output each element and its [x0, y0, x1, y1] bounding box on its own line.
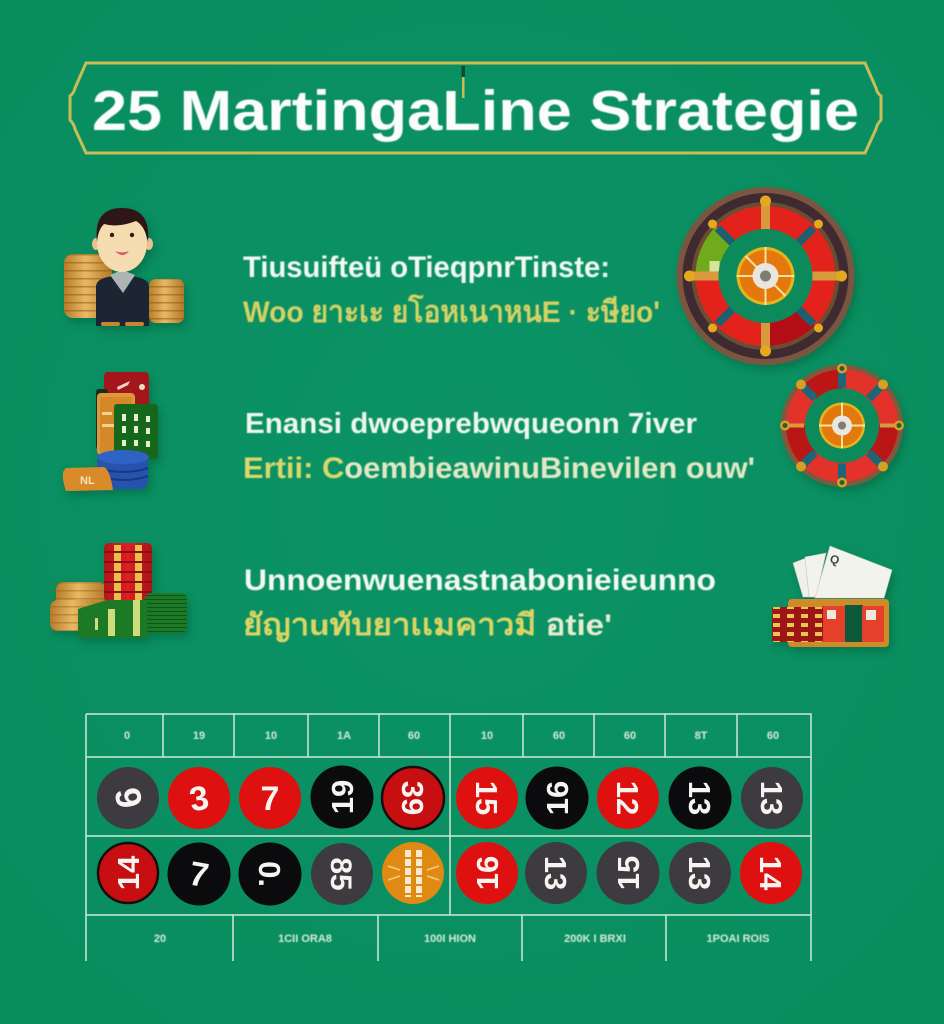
row 1 number chips: 39 [395, 781, 430, 815]
head [92, 208, 153, 272]
row 1 number chips: 13 [754, 781, 789, 815]
footer row labels: 1CII ORA8 [278, 933, 332, 945]
header row labels: 19 [193, 730, 205, 742]
red card [104, 372, 149, 406]
row 2 number chips: 85 [324, 857, 357, 891]
title banner [70, 63, 881, 153]
row 2 number chips: 13 [538, 856, 573, 890]
header row labels: 60 [553, 730, 565, 742]
row 1 number chips: 3 [187, 779, 212, 819]
panel: strategy text 3 [243, 564, 716, 643]
row 2 number chips: 14 [753, 856, 788, 891]
icon: chip stacks and money [50, 543, 187, 638]
panel: strategy text 1 [243, 251, 660, 329]
header row labels: 8T [695, 730, 708, 742]
red chip stack [104, 543, 152, 602]
header row labels [124, 730, 779, 742]
header row labels: 60 [624, 730, 636, 742]
icon: playing cards and chip box [772, 546, 892, 647]
dark card edge [96, 389, 108, 449]
icon: cards and blue chips [63, 372, 158, 491]
right coin stack [149, 279, 184, 323]
row 2 number chips: 16 [470, 856, 505, 890]
strategy 3 heading: Unnoenwuenastnabonieieunno [244, 564, 716, 597]
shoes [101, 322, 144, 326]
red pockets [786, 370, 898, 472]
row 2 number chips [98, 842, 802, 906]
row 1 number chips: 12 [610, 781, 645, 815]
banner tick [462, 66, 465, 98]
collar [110, 270, 135, 293]
icon: large roulette wheel [676, 187, 854, 365]
left coin stack [64, 254, 112, 318]
footer row labels [154, 933, 769, 945]
banner frame [70, 63, 881, 153]
header row labels: 60 [408, 730, 420, 742]
front money block [78, 600, 147, 638]
wheel rim [781, 364, 903, 486]
table grid [86, 714, 811, 961]
card box [788, 599, 889, 647]
row 2 number chips: 14 [111, 855, 146, 890]
blue chips [97, 450, 149, 489]
footer row labels: 100I HION [424, 933, 476, 945]
row 1 number chips: 13 [682, 781, 717, 815]
header row labels: 10 [265, 730, 277, 742]
footer row labels: 1POAI ROIS [707, 933, 769, 945]
right money stack [145, 593, 187, 633]
row 2 number chips: 13 [682, 856, 717, 890]
row 1 number chips [97, 766, 803, 830]
row 2 number chips: 0. [252, 861, 287, 887]
row 1 number chips: 16 [540, 781, 575, 815]
gold coins [50, 582, 106, 631]
footer row labels: 200K I BRXI [564, 933, 626, 945]
orange centre [819, 402, 865, 448]
row 1 number chips: 19 [325, 780, 360, 814]
row 1 number chips: 15 [469, 781, 504, 815]
header row labels: 0 [124, 730, 130, 742]
red pockets [696, 218, 824, 346]
green card [114, 404, 158, 459]
orange centre [736, 247, 794, 305]
back card [793, 558, 818, 597]
front card: Q [828, 552, 841, 568]
gold bar: NL [80, 475, 95, 487]
header row labels: 10 [481, 730, 493, 742]
spokes [780, 364, 904, 488]
suit [96, 274, 149, 326]
red chip block [772, 607, 823, 642]
orange card [97, 393, 135, 455]
header row labels: 1A [337, 730, 351, 742]
icon: businessman with coin stacks [64, 208, 184, 326]
wheel rims [676, 187, 854, 365]
strategy 1 detail: Woo ยาะเะ ยโอหเนาหนE · ะษียo' [243, 293, 660, 329]
header row labels: 60 [767, 730, 779, 742]
row 1 number chips: 9 [107, 784, 150, 811]
row 1 number chips: 7 [261, 780, 279, 818]
icon: small roulette wheel [780, 364, 904, 488]
strategy 2 heading: Enansi dwoeprebwqueonn 7iver [245, 408, 697, 440]
green hub [718, 229, 812, 323]
spokes [684, 196, 847, 356]
footer row labels: 20 [154, 933, 166, 945]
strategy 1 heading: Tiusuifteü oTieqpnrTinste: [243, 251, 610, 284]
strategy 3 detail: ยัญาuทับยาเเมคาวมี อtie' [243, 609, 612, 643]
row 2 number chips: 7 [186, 855, 211, 895]
row 2 number chips: 15 [611, 856, 646, 890]
strategy 2 detail: Ertii: CoembieawinuBinevilen ouw' [243, 452, 755, 485]
orange decorated chip [382, 842, 444, 904]
green hub [805, 388, 879, 462]
roulette table [86, 714, 811, 961]
panel: strategy text 2 [243, 408, 755, 485]
title: 25 MartingaLine Strategie [92, 79, 859, 143]
middle card [805, 553, 826, 597]
